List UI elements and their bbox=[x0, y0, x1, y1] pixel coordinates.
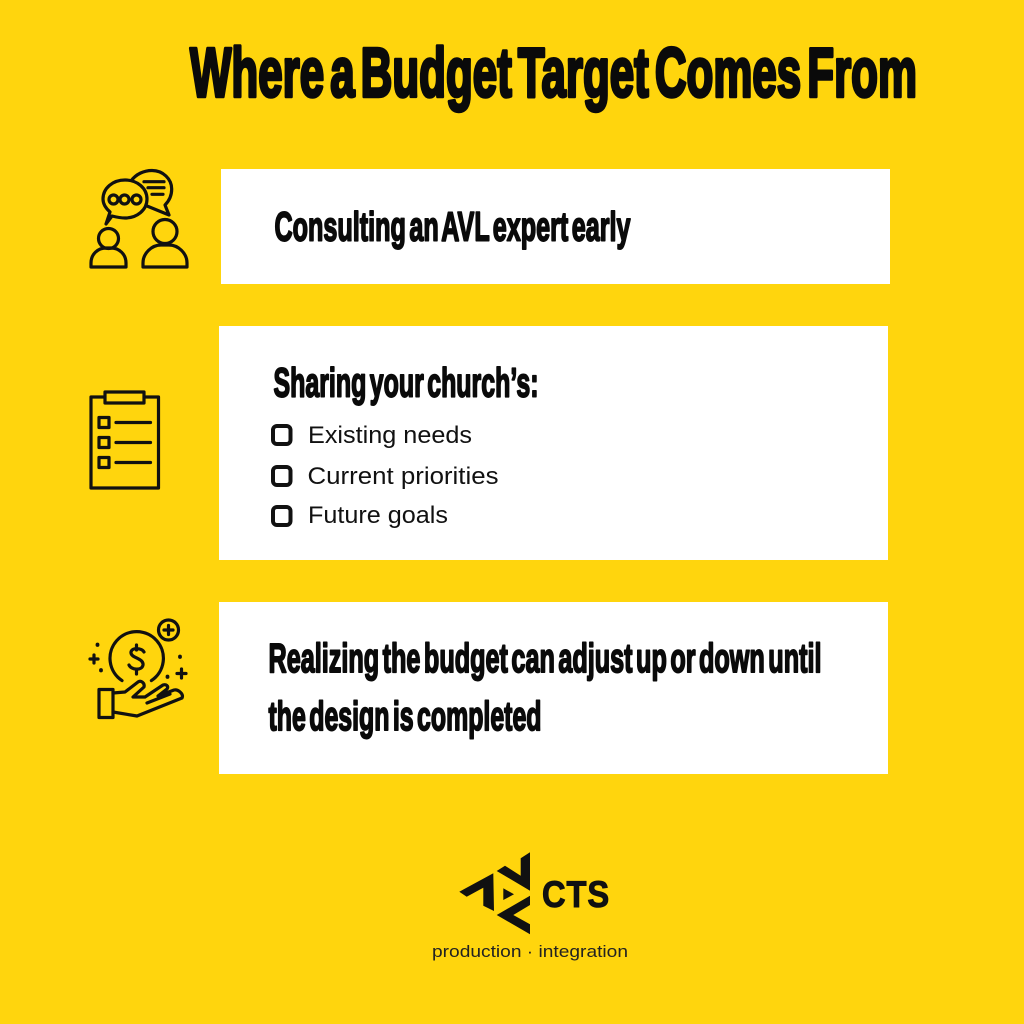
checklist: Existing needs bbox=[308, 422, 472, 449]
panel text: consulting: Consulting an AVL expert early bbox=[274, 204, 631, 250]
panel: realizing the budget can adjust: the design is completed bbox=[268, 693, 542, 739]
logo wordmark: CTS bbox=[542, 874, 610, 915]
checklist: Future goals bbox=[308, 502, 448, 529]
logo tagline: production · integration bbox=[432, 942, 628, 961]
checklist bbox=[273, 422, 498, 529]
icon: conversation between two people bbox=[91, 170, 187, 267]
icon: clipboard checklist bbox=[91, 392, 158, 488]
logo: CTS bbox=[432, 852, 628, 961]
panel: realizing the budget can adjust bbox=[219, 602, 888, 774]
panel: consulting an AVL expert bbox=[221, 169, 890, 284]
panel heading: sharing: Sharing your church’s: bbox=[274, 360, 538, 406]
icon: hand holding coin bbox=[90, 620, 186, 718]
logo mark bbox=[459, 852, 530, 934]
checklist: Current priorities bbox=[308, 463, 498, 490]
panel: sharing your church's bbox=[219, 326, 888, 560]
